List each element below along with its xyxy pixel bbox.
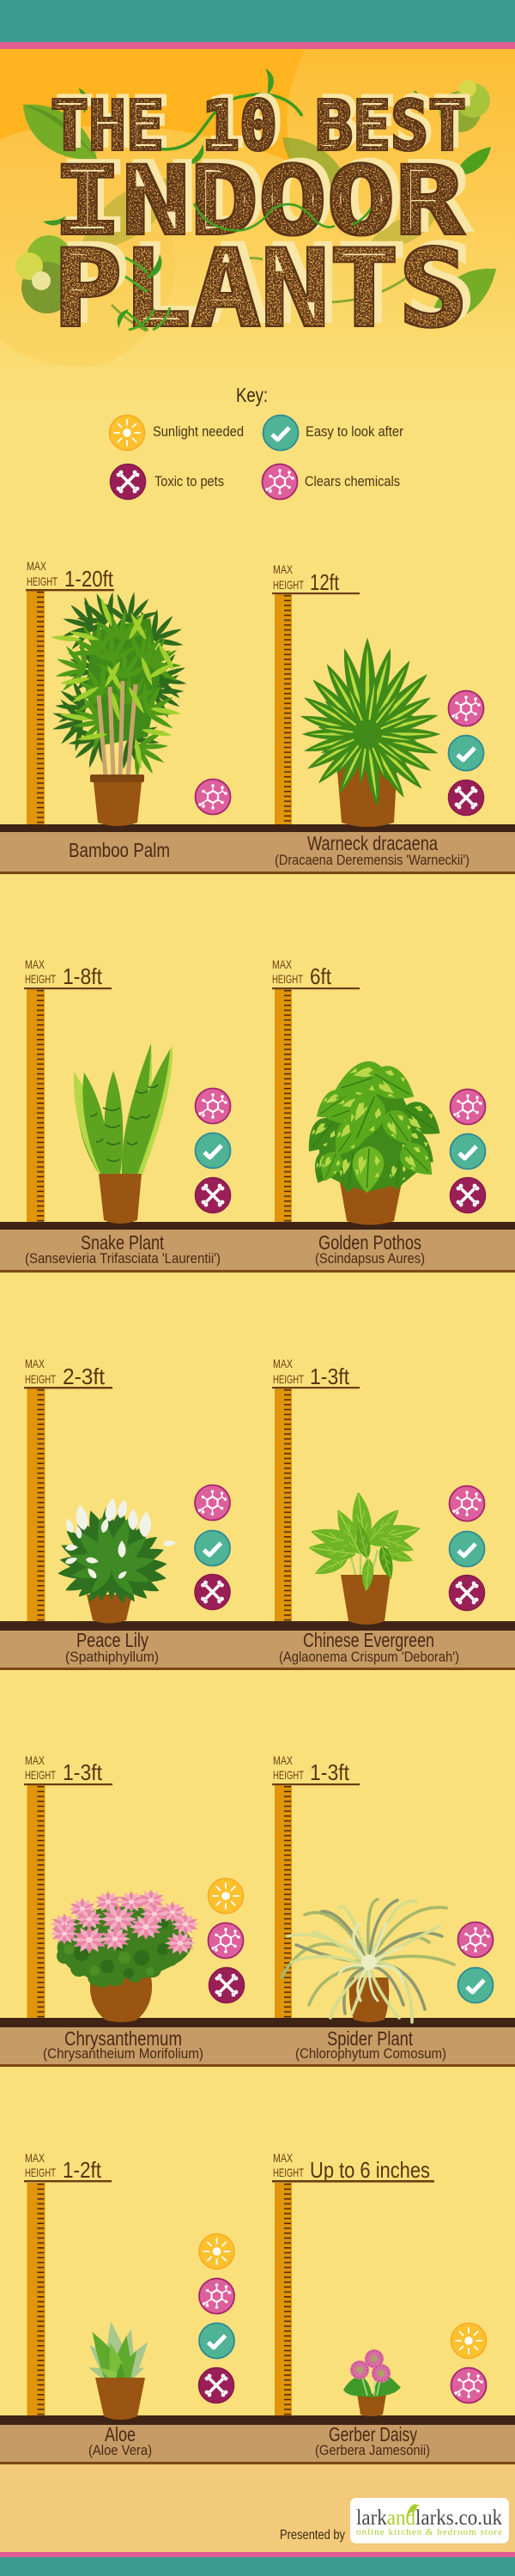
icon: toxic to pets [450,1575,484,1611]
plant name: Chrysanthemum [64,2027,182,2050]
plant name: (Sansevieria Trifasciata 'Laurentii') [25,1250,221,1267]
icon: easy to look after [450,1133,486,1170]
height label: HEIGHT [25,972,56,986]
plant: stems [350,1546,378,1577]
height ruler [275,1388,292,1621]
pot [90,775,144,826]
plant name: (Spathiphyllum) [65,1649,159,1665]
title: PLANTS [53,228,468,351]
height label: 1-3ft [310,1759,350,1785]
plant name: Chinese Evergreen [303,1629,434,1651]
height ruler [275,2183,292,2415]
icon: clears chemicals [196,780,230,814]
plant name: Bamboo Palm [69,839,170,861]
height label: MAX [273,1357,293,1370]
panel: row 2 shelf [0,1222,515,1273]
plant name: (Dracaena Deremensis 'Warneckii') [275,852,470,868]
chrysanthemum flowers [50,1889,200,1955]
plant name: (Chlorophytum Comosum) [295,2045,446,2062]
icon: clears chemicals [196,1089,230,1123]
key heading: Key: [236,384,268,406]
height label: HEIGHT [27,574,58,588]
height label: 2-3ft [63,1364,106,1389]
plant name [315,1231,425,1267]
plant: gerber daisy [343,2349,401,2397]
icon: easy to look after [450,1532,484,1566]
height label [24,1753,112,1785]
height label: HEIGHT [273,1768,304,1782]
height label [272,957,360,989]
logo [350,2498,509,2543]
plant name: Golden Pothos [318,1231,421,1254]
height label: MAX [27,559,46,573]
icon: toxic to pets [209,1968,244,2002]
logo: larkandlarks.co.uk [356,2506,502,2530]
plant name [43,2027,203,2062]
title: THE 10 BEST [56,82,471,162]
pot [340,1182,402,1224]
plant: peace lily [57,1506,167,1606]
key: sunlight needed [110,416,244,450]
height label: 6ft [310,963,332,989]
height label [272,562,360,595]
icon: easy to look after [448,735,484,771]
spathe flowers [64,1498,176,1580]
header banner [0,0,515,404]
icon: easy to look after [196,1133,230,1168]
icon: easy to look after [195,1530,230,1566]
icon: clears chemicals [450,1089,486,1125]
height label: MAX [273,1753,293,1767]
panel: row 5 shelf [0,2415,515,2464]
height ruler [27,2183,45,2415]
key: sunlight needed: Sunlight needed [153,423,244,440]
height label: HEIGHT [25,2166,56,2179]
plant name: Spider Plant [327,2027,413,2050]
plant: chrysanthemum foliage [57,1906,192,1988]
pot [99,1174,142,1224]
pot [336,761,397,827]
height label: MAX [272,957,292,971]
plant name [88,2423,152,2458]
title: THE 10 BEST [51,87,466,166]
height label: HEIGHT [273,1372,304,1386]
plant name: Warneck dracaena [307,832,438,854]
plant: pothos [299,1056,449,1194]
footer [0,2464,515,2576]
key: toxic to pets: Toxic to pets [154,473,224,489]
key: clears chemicals [263,464,400,500]
pot [90,1973,152,2022]
plant name [295,2027,446,2062]
plant: evergreen leaves [307,1491,422,1592]
icon: toxic to pets [448,780,484,816]
plant name [25,1231,221,1267]
icon: clears chemicals [448,690,484,726]
icon: clears chemicals [208,1923,244,1958]
icon: sunlight needed [208,1879,244,1913]
icon: clears chemicals [451,2368,486,2403]
height label: HEIGHT [25,1372,56,1386]
height ruler [27,591,45,824]
height ruler [27,989,45,1222]
plant: aloe [80,2319,158,2389]
icon: toxic to pets [195,1575,230,1609]
panel: warneck dracaena [272,562,484,868]
logo: online kitchen & bedroom store [356,2527,502,2537]
height ruler [275,989,292,1222]
panel: chinese evergreen [272,1357,484,1665]
icon: sunlight needed [199,2234,234,2269]
height label: 1-3ft [63,1759,103,1785]
plant name: Snake Plant [81,1231,164,1254]
title illustration: leaves and vines behind the lettering [15,69,496,331]
icon: toxic to pets [199,2368,233,2403]
plant: dracaena [299,637,441,808]
pot [87,1595,132,1623]
plant: bamboo [45,581,195,787]
panel: bamboo palm [26,559,230,861]
title: PLANTS [60,222,476,347]
plant name: Gerber Daisy [329,2423,417,2445]
plant name [279,1629,459,1665]
plant: snake plant [74,1043,173,1175]
icon: toxic to pets [196,1178,230,1212]
plant name: Aloe [105,2423,136,2445]
icon: clears chemicals [458,1922,493,1958]
icon: clears chemicals [195,1485,230,1520]
icon: clears chemicals [199,2279,234,2313]
height label: 1-20ft [64,566,114,592]
panel: golden pothos [272,957,486,1267]
panel: aloe [24,2151,234,2458]
height label [272,2151,434,2183]
height label: HEIGHT [25,1768,56,1782]
height label: HEIGHT [273,578,304,592]
height label [272,1753,360,1785]
panel: snake plant [24,957,230,1267]
plant: spider plant fronds [282,1899,454,2022]
panel: spider plant [272,1753,493,2062]
height label: 1-8ft [63,963,103,989]
height ruler [27,1785,45,2018]
icon: clears chemicals [450,1485,484,1522]
pot [341,1575,391,1625]
plant name: Peace Lily [76,1629,148,1651]
height label: MAX [273,562,293,576]
panel: chrysanthemum [24,1753,244,2062]
panel: row 1 shelf [0,824,515,874]
key: clears chemicals: Clears chemicals [305,473,400,489]
icon: toxic to pets [450,1178,486,1212]
title vines in front of lettering [113,204,371,331]
key: easy to look after [263,416,403,450]
plant name: (Gerbera Jamesonii) [315,2442,430,2458]
title [51,82,476,351]
height ruler [275,1785,292,2018]
key: toxic to pets [110,464,224,500]
height ruler [27,1388,45,1621]
height label: MAX [25,1753,45,1767]
icon: easy to look after [199,2324,234,2358]
height ruler [275,594,292,824]
panel: gerber daisy [272,2151,486,2458]
height label: MAX [25,2151,45,2165]
height label: Up to 6 inches [310,2157,430,2183]
height label [24,1357,112,1389]
title: INDOOR [59,143,471,253]
height label: 12ft [310,569,340,595]
height label: HEIGHT [273,2166,304,2179]
height label: MAX [273,2151,293,2165]
icon: sunlight needed [451,2324,486,2358]
height label: HEIGHT [272,972,303,986]
pot [95,2378,145,2420]
pot [357,2394,386,2416]
height label: MAX [25,1357,45,1370]
height label [24,957,112,989]
panel: row 4 shelf [0,2018,515,2067]
height label [24,2151,112,2183]
plant name: (Aglaonema Crispum 'Deborah') [279,1649,459,1665]
height label: MAX [25,957,45,971]
key [110,384,403,500]
height label: 1-3ft [310,1364,350,1389]
title: INDOOR [53,146,464,256]
plant name [275,832,470,868]
key: easy to look after: Easy to look after [306,423,403,440]
plant name: (Chrysantheium Morifolium) [43,2045,203,2062]
plant name: (Aloe Vera) [88,2442,152,2458]
plant name: (Scindapsus Aures) [315,1250,425,1267]
height label [272,1357,360,1389]
plant name [65,1629,159,1665]
plant name [315,2423,430,2458]
height label: 1-2ft [63,2157,102,2183]
icon: easy to look after [458,1968,493,2002]
height label [26,559,114,592]
pot [349,1978,389,2022]
panel: row 3 shelf [0,1621,515,1670]
presented by: Presented by [280,2528,345,2543]
panel: peace lily [24,1357,230,1665]
